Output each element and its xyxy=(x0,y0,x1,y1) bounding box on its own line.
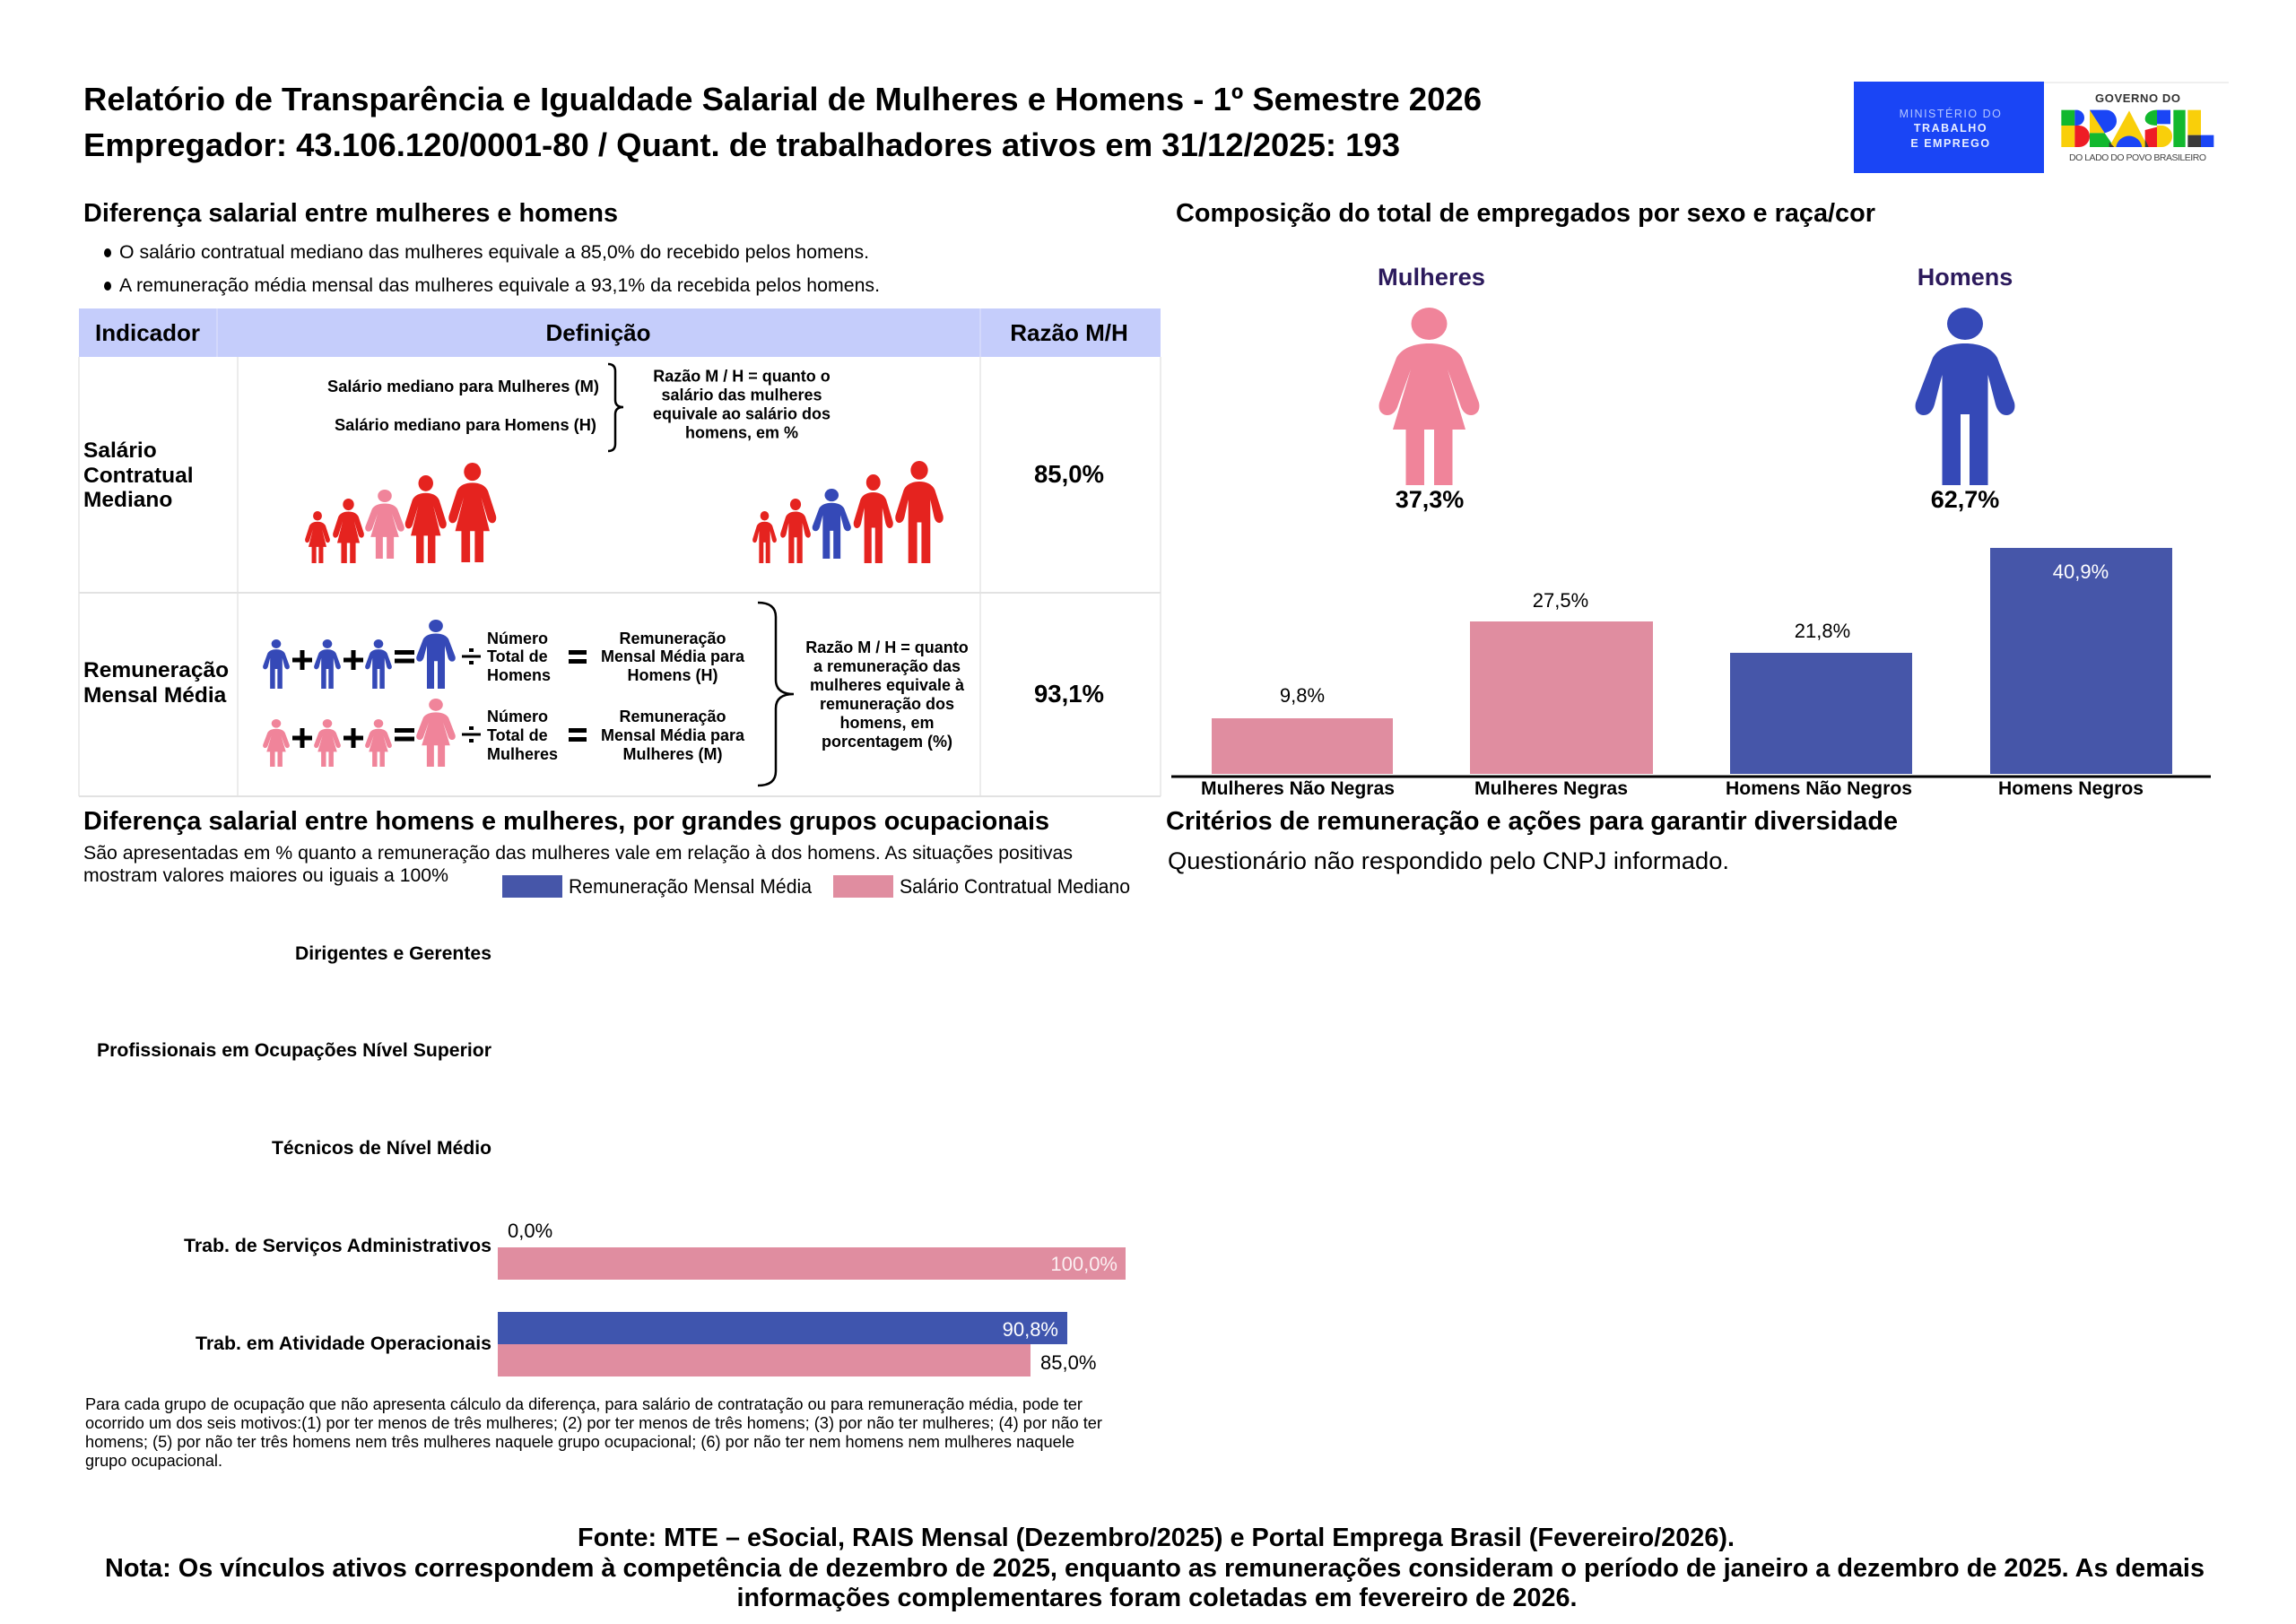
bar: Mulheres Não Negras xyxy=(1212,684,1393,774)
panel: diferença salarial xyxy=(79,199,1161,796)
bars: Trab. em Atividade Operacionais xyxy=(498,1312,1096,1376)
row label: Remuneração xyxy=(83,658,229,682)
women result text: Mulheres (M) xyxy=(622,745,723,763)
icon: woman xyxy=(1379,308,1479,485)
definition text xyxy=(653,368,831,441)
panel: composição por sexo e raça/cor xyxy=(1171,199,2211,799)
legend: Salário Contratual Mediano xyxy=(900,875,1130,898)
bullet texts: A remuneração média mensal das mulheres equivale a 93,1% da recebida pelos homens. xyxy=(119,274,880,296)
definition text xyxy=(805,638,969,751)
category labels: Homens Não Negros xyxy=(1726,777,1912,799)
bar: Mulheres Negras xyxy=(1470,589,1653,774)
row label: Mensal Média xyxy=(83,683,227,708)
women totals text: Mulheres xyxy=(487,745,558,763)
value: 85,0%: 85,0% xyxy=(1034,460,1104,488)
table header: Definição xyxy=(545,319,651,346)
footer: fonte e nota: informações complementares foram coletadas em fevereiro de 2026. xyxy=(737,1584,1577,1612)
definition text: Razão M / H = quanto xyxy=(805,638,969,656)
icons: women, median highlighted xyxy=(305,463,496,563)
women totals text xyxy=(487,708,558,763)
value: women share: 37,3% xyxy=(1396,486,1464,513)
logo: Ministério do Trabalho e Emprego: TRABALHO xyxy=(1914,122,1987,135)
heading: grupos ocupacionais: Diferença salarial entre homens e mulheres, por grandes grupos ocupacionais xyxy=(83,807,1049,836)
description: São apresentadas em % quanto a remuneração das mulheres vale em relação à dos homens. As situações positivas xyxy=(83,842,1073,864)
table header xyxy=(79,308,1161,357)
heading: critérios: Critérios de remuneração e ações para garantir diversidade xyxy=(1166,807,1898,836)
definition text: remuneração dos xyxy=(820,695,954,713)
logo: Governo do Brasil: GOVERNO DO xyxy=(2095,91,2180,105)
category labels: Profissionais em Ocupações Nível Superior xyxy=(97,1039,492,1061)
definition text: equivale ao salário dos xyxy=(653,405,831,423)
men result text: Remuneração xyxy=(619,630,726,647)
category labels: Mulheres Negras xyxy=(1474,777,1628,799)
bullet texts: O salário contratual mediano das mulheres equivale a 85,0% do recebido pelos homens. xyxy=(119,241,869,263)
women totals text: Total de xyxy=(487,726,548,744)
category labels: Mulheres Não Negras xyxy=(1201,777,1395,799)
heading: diferença salarial: Diferença salarial entre mulheres e homens xyxy=(83,199,618,228)
definition text: porcentagem (%) xyxy=(822,733,952,751)
bar: Mulheres Não Negras: 9,8% xyxy=(1280,684,1325,707)
label: Homens: Homens xyxy=(1918,264,2013,291)
footer: fonte e nota: Fonte: MTE – eSocial, RAIS Mensal (Dezembro/2025) e Portal Emprega Brasil (Fevereiro/2026). xyxy=(578,1524,1735,1552)
row: salário contratual mediano xyxy=(83,364,1104,563)
men result text: Mensal Média para xyxy=(601,647,745,665)
logo: Ministério do Trabalho e Emprego: E EMPREGO xyxy=(1910,137,1991,150)
description: mostram valores maiores ou iguais a 100% xyxy=(83,864,448,886)
definition labels: Salário mediano para Homens (H) xyxy=(335,416,596,434)
footer: fonte e nota xyxy=(105,1524,2205,1612)
category labels: Trab. em Atividade Operacionais xyxy=(196,1333,491,1354)
brace xyxy=(608,364,623,451)
bars: Trab. de Serviços Administrativos xyxy=(498,1220,1126,1280)
title: Empregador: 43.106.120/0001-80 / Quant. de trabalhadores ativos em 31/12/2025: 193 xyxy=(83,126,1400,163)
category labels: Homens Negros xyxy=(1998,777,2144,799)
panel: grupos ocupacionais xyxy=(83,807,1130,1470)
bar chart: sexo e raça/cor xyxy=(1171,548,2211,799)
table xyxy=(79,308,1161,796)
footer: fonte e nota: Nota: Os vínculos ativos correspondem à competência de dezembro de 2025, enquanto as remunerações consideram o período de janeiro a dezembro de 2025. As demais xyxy=(105,1554,2205,1583)
category labels: Técnicos de Nível Médio xyxy=(272,1137,491,1159)
footnote: ocorrido um dos seis motivos:(1) por ter menos de três mulheres; (2) por ter menos de três homens; (3) por não ter mulheres; (4) por não ter xyxy=(85,1414,1102,1432)
women result text: Remuneração xyxy=(619,708,726,725)
definition text: Razão M / H = quanto o xyxy=(653,368,831,386)
bar: Homens Negros xyxy=(1990,548,2172,774)
row label xyxy=(83,658,229,708)
value: 93,1%: 93,1% xyxy=(1034,680,1104,708)
men equation icons xyxy=(263,620,456,689)
table header: Indicador xyxy=(95,319,200,346)
category labels: Dirigentes e Gerentes xyxy=(295,942,491,964)
body text: Questionário não respondido pelo CNPJ informado. xyxy=(1168,847,1729,874)
equation operators xyxy=(292,648,587,748)
icon: man xyxy=(1916,308,2014,485)
logo: Governo do Brasil: DO LADO DO POVO BRASILEIRO xyxy=(2069,152,2206,163)
definition text: salário das mulheres xyxy=(661,386,822,404)
logo: Governo do Brasil xyxy=(2044,82,2229,163)
logo: Ministério do Trabalho e Emprego: MINISTÉRIO DO xyxy=(1900,107,2002,120)
bars: Trab. de Serviços Administrativos: 100,0% xyxy=(1050,1253,1118,1275)
icons: men, median highlighted xyxy=(752,461,944,563)
definition text: mulheres equivale à xyxy=(810,676,965,694)
men totals text: Número xyxy=(487,630,548,647)
bar: Homens Não Negros xyxy=(1730,620,1912,774)
footnote: Para cada grupo de ocupação que não apresenta cálculo da diferença, para salário de contratação ou para remuneração média, pode ter xyxy=(85,1395,1083,1413)
bar: Mulheres Negras: 27,5% xyxy=(1533,589,1588,612)
definition text: homens, em % xyxy=(685,423,798,441)
heading: composição: Composição do total de empregados por sexo e raça/cor xyxy=(1176,199,1875,228)
women equation icons xyxy=(263,699,456,767)
definition labels xyxy=(327,378,599,434)
bars: Trab. de Serviços Administrativos: 0,0% xyxy=(508,1220,552,1242)
men totals text: Total de xyxy=(487,647,548,665)
panel: critérios de remuneração xyxy=(1166,807,1898,874)
bar: Homens Negros: 40,9% xyxy=(2053,560,2109,583)
title xyxy=(83,81,1482,163)
row label xyxy=(83,439,194,512)
logo: Ministério do Trabalho e Emprego xyxy=(1854,82,2044,173)
definition text: homens, em xyxy=(839,714,935,732)
definition labels: Salário mediano para Mulheres (M) xyxy=(327,378,599,395)
women result text: Mensal Média para xyxy=(601,726,745,744)
category labels: Trab. de Serviços Administrativos xyxy=(184,1235,491,1256)
table header: Razão M/H xyxy=(1010,319,1128,346)
men totals text xyxy=(487,630,551,684)
footnote xyxy=(85,1395,1102,1470)
large brace xyxy=(758,603,794,786)
bar: Homens Não Negros: 21,8% xyxy=(1795,620,1850,642)
bars: Trab. em Atividade Operacionais: 90,8% xyxy=(1003,1318,1058,1341)
footnote: homens; (5) por não ter três homens nem três mulheres naquele grupo ocupacional; (6) por não ter nem homens nem mulheres naquele xyxy=(85,1433,1074,1451)
women result text xyxy=(601,708,745,763)
definition text: a remuneração das xyxy=(813,657,961,675)
men result text xyxy=(601,630,745,684)
label: Mulheres: Mulheres xyxy=(1378,264,1485,291)
men result text: Homens (H) xyxy=(627,666,718,684)
row label: Mediano xyxy=(83,488,172,512)
men totals text: Homens xyxy=(487,666,551,684)
legend: Remuneração Mensal Média xyxy=(569,875,813,898)
bars: Trab. em Atividade Operacionais: 85,0% xyxy=(1040,1351,1096,1374)
row label: Contratual xyxy=(83,464,194,488)
value: men share: 62,7% xyxy=(1931,486,1999,513)
title: Relatório de Transparência e Igualdade Salarial de Mulheres e Homens - 1º Semestre 2026 xyxy=(83,81,1482,117)
category labels xyxy=(1201,777,2144,799)
legend xyxy=(502,875,1130,898)
category labels xyxy=(97,942,492,1354)
women totals text: Número xyxy=(487,708,548,725)
bullet texts xyxy=(104,241,880,296)
horizontal bar chart xyxy=(97,942,1126,1376)
row label: Salário xyxy=(83,439,157,463)
row: remuneração mensal média xyxy=(83,603,1104,786)
footnote: grupo ocupacional. xyxy=(85,1452,222,1470)
description xyxy=(83,842,1073,886)
